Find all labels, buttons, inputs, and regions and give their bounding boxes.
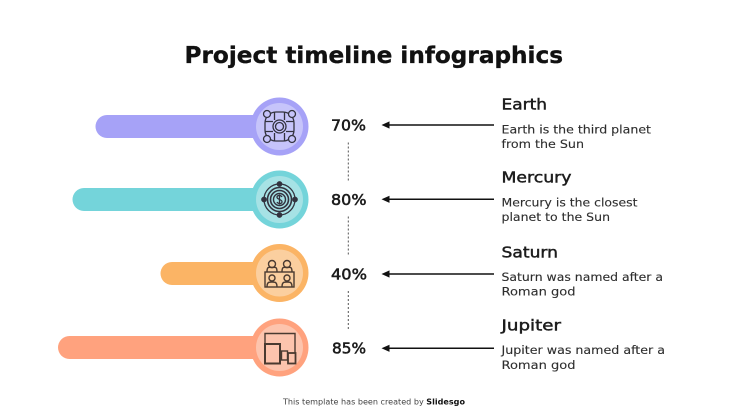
description: Earth: from the Sun: [502, 138, 584, 151]
description: Saturn: Saturn was named after a: [502, 271, 663, 284]
bar: Jupiter 85%: [58, 336, 280, 359]
badge: Mercury: [250, 170, 308, 228]
heading: Saturn: Saturn: [502, 244, 558, 262]
row: Mercury: [72, 169, 641, 228]
percentage: 85%: 85%: [332, 340, 366, 358]
heading: Earth: Earth: [502, 95, 547, 113]
description: Jupiter: Jupiter was named after a: [500, 344, 665, 357]
heading: Mercury: Mercury: [502, 169, 572, 187]
badge: Earth: [250, 98, 308, 156]
arrow: Mercury: [382, 196, 494, 203]
description: Mercury: Mercury is the closest: [502, 196, 638, 210]
description: Jupiter: Roman god: [502, 359, 576, 372]
connector: 70 to 80: [347, 142, 349, 182]
badge: Jupiter: [250, 318, 308, 376]
row: Earth: [96, 95, 655, 156]
icon: dollar target: [262, 182, 297, 217]
description: Mercury: planet to the Sun: [502, 211, 610, 224]
bar: Saturn 40%: [160, 262, 280, 285]
arrow: Earth: [382, 121, 494, 129]
footer credit: This template has been created by Slidesgo: [282, 398, 465, 406]
connector: 40 to 85: [347, 291, 349, 331]
row: Saturn: [160, 244, 667, 302]
row: Jupiter: [58, 317, 669, 376]
percentage: 80%: 80%: [331, 191, 366, 209]
description: Earth: Earth is the third planet: [502, 124, 652, 136]
badge: Saturn: [250, 244, 308, 302]
icon: video meeting: [265, 260, 294, 287]
icon: devices: [265, 334, 296, 364]
bar: Mercury 80%: [72, 188, 280, 211]
percentage: 40%: 40%: [331, 265, 367, 283]
bar: Earth 70%: [96, 115, 280, 138]
arrow: Saturn: [382, 270, 494, 278]
title: Project timeline infographics: [184, 41, 563, 69]
percentage: 70%: 70%: [331, 116, 366, 134]
connector: 80 to 40: [347, 216, 349, 256]
icon: lifebuoy: [264, 110, 296, 142]
arrow: Jupiter: [382, 345, 494, 352]
heading: Jupiter: Jupiter: [500, 317, 562, 335]
description: Saturn: Roman god: [502, 286, 576, 299]
